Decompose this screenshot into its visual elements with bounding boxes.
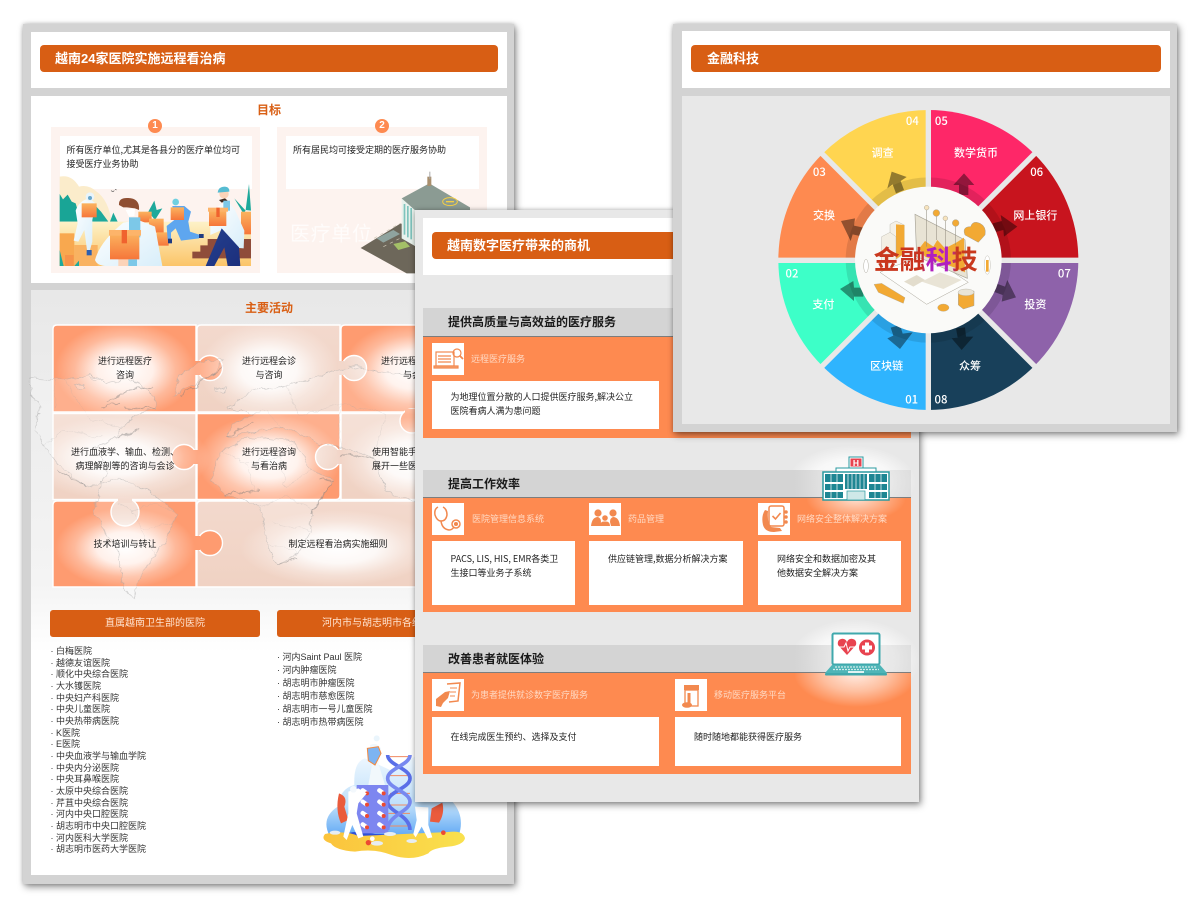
puzzle caption: haematology consult: 病理解剖等的咨询与会诊	[75, 459, 174, 472]
white box 1	[432, 541, 575, 605]
list: city hospitals: · 胡志明市一号儿童医院	[277, 704, 372, 714]
puzzle caption: remote treatment	[242, 445, 296, 472]
icon: hand with phone	[432, 679, 464, 711]
puzzle caption: remote consultation: 进行远程会诊	[242, 354, 296, 367]
icon: hospital building: H	[853, 458, 859, 468]
list: ministry hospitals: · 河内中央口腔医院	[50, 809, 128, 819]
puzzle caption: remote consultation	[242, 354, 296, 381]
goal 2 number badge	[375, 119, 389, 133]
puzzle caption: telemedicine consult	[98, 354, 152, 381]
description 3: 网络安全和数据加密及其	[777, 552, 876, 565]
icon: mobile platform	[675, 679, 707, 711]
puzzle caption: telemedicine consult: 进行远程医疗	[98, 354, 152, 367]
icon: phone security	[758, 503, 790, 535]
goal 1 text box	[60, 136, 252, 189]
description 2: 供应链管理,数据分析解决方案	[608, 552, 728, 565]
description 2: 随时随地都能获得医疗服务	[694, 730, 802, 743]
puzzle caption: smartphone use: 展开一些医疗	[372, 459, 426, 472]
sector 07 investment	[928, 260, 1078, 366]
list: city hospitals: · 胡志明市热带病医院	[277, 716, 364, 726]
sector 01 blockchain	[822, 260, 928, 410]
list: ministry hospitals: · K医院	[50, 728, 80, 738]
label: 网络安全整体解决方案	[797, 514, 887, 524]
list: city hospitals: · 河内Saint Paul 医院	[277, 652, 362, 662]
label: 远程医疗服务	[471, 354, 525, 364]
section bar: efficiency	[423, 470, 911, 498]
puzzle caption: regulations: 制定远程看治病实施细则	[288, 537, 388, 550]
sector numbers: 07	[1058, 265, 1071, 281]
central fintech illustration	[864, 205, 990, 311]
goal 1 number badge: 1	[152, 120, 158, 131]
section body: efficiency	[423, 498, 911, 612]
puzzle caption: smartphone use: 使用智能手机	[372, 445, 426, 458]
puzzle caption: remote treatment: 进行远程咨询	[242, 445, 296, 458]
section body: quality services	[423, 337, 911, 438]
description 1	[450, 552, 558, 579]
arrows	[840, 172, 1017, 350]
left worker	[74, 198, 96, 250]
sector labels: 支付	[812, 296, 834, 312]
sector labels: 数学货币	[954, 145, 998, 161]
sector labels: 众筹	[959, 358, 981, 374]
sector numbers	[786, 113, 1071, 407]
white description box	[432, 381, 659, 429]
list: ministry hospitals: · 中央耳鼻喉医院	[50, 774, 119, 784]
sector numbers: 03	[813, 164, 826, 180]
panel: business opportunities card	[415, 210, 919, 802]
icon: stethoscope	[432, 503, 464, 535]
sector labels: 交换	[813, 207, 835, 223]
list: ministry hospitals: · 中央热带病医院	[50, 716, 119, 726]
list: city hospitals	[277, 652, 372, 726]
heading: main activities: 主要活动	[245, 301, 293, 315]
illustration: isometric hospital building with faded label	[290, 172, 470, 274]
world map overlay	[28, 358, 415, 599]
list: ministry hospitals: · 大水镬医院	[50, 681, 101, 691]
puzzle caption: remote treatment: 与看治病	[251, 459, 287, 472]
central man	[95, 220, 162, 266]
section bar: patient experience	[423, 645, 911, 673]
list: ministry hospitals: · 顺化中央综合医院	[50, 669, 128, 679]
sector numbers: 08	[935, 391, 947, 407]
list: ministry hospitals: · 中央血液学与输血学院	[50, 751, 146, 761]
sector labels: 网上银行	[1013, 207, 1057, 223]
sector numbers: 02	[786, 265, 798, 281]
center circle	[855, 187, 1002, 333]
title banner	[432, 232, 902, 259]
icon: people group	[589, 503, 621, 535]
puzzle caption: remote diagnosis: 进行远程诊断	[381, 354, 435, 367]
right doctor	[210, 201, 244, 248]
description 3	[777, 552, 876, 579]
sector numbers: 01	[905, 391, 918, 407]
button: Hanoi and HCMC hospitals	[277, 610, 487, 637]
sector labels: 区块链	[870, 358, 903, 374]
header panel	[682, 31, 1170, 88]
sector 08 crowdfunding	[928, 260, 1034, 410]
white box 3	[758, 541, 901, 605]
section bar: efficiency: 提高工作效率	[448, 477, 520, 491]
description	[450, 390, 633, 417]
button: hospitals under ministry of health	[50, 610, 260, 637]
panel: goals	[31, 96, 507, 283]
list: ministry hospitals: · 太原中央综合医院	[50, 786, 128, 796]
body panel	[682, 96, 1170, 424]
sector labels: 调查	[872, 145, 894, 161]
header panel	[423, 218, 911, 275]
goal card 1	[51, 127, 260, 273]
puzzle caption: haematology consult: 进行血液学、输血、检测、	[71, 445, 179, 458]
list: city hospitals: · 胡志明市肿瘤医院	[277, 678, 354, 688]
illustration: medical workers carrying boxes	[60, 176, 251, 266]
title banner: 越南数字医疗带来的商机	[447, 238, 590, 253]
sector 02 payment	[778, 260, 928, 366]
title banner	[40, 45, 498, 72]
sector 06 online banking	[928, 154, 1078, 260]
glow behind laptop icon	[791, 620, 919, 700]
goal 2 text: 所有居民均可接受定期的医疗服务协助	[293, 143, 446, 156]
goal 2 text box	[286, 136, 479, 189]
description 3: 他数据安全解决方案	[777, 566, 858, 579]
list: ministry hospitals: · 胡志明市中央口腔医院	[50, 821, 146, 831]
puzzle caption: smartphone use	[372, 445, 426, 472]
description: 医院看病人满为患问题	[450, 404, 541, 417]
heading: goals: 目标	[257, 103, 281, 117]
section body: patient experience	[423, 673, 911, 774]
sector numbers: 05	[935, 113, 948, 129]
label: 医院管理信息系统	[472, 514, 544, 524]
list: ministry hospitals: · 越德友谊医院	[50, 658, 110, 668]
central title: 金融科技	[874, 240, 978, 277]
panel: main activities and hospital lists	[31, 290, 507, 875]
section bar: quality services: 提供高质量与高效益的医疗服务	[448, 315, 616, 329]
illustration: DNA and pills with scientists	[323, 736, 465, 858]
goal 1 text: 接受医疗业务协助	[66, 157, 139, 170]
title banner: 越南24家医院实施远程看治病	[55, 51, 225, 66]
puzzle caption: remote diagnosis: 与会诊	[403, 368, 430, 381]
icon: hospital building	[822, 456, 890, 501]
sector labels	[812, 145, 1057, 374]
list: ministry hospitals: · E医院	[50, 739, 80, 749]
white box 2	[675, 717, 901, 766]
header panel	[31, 32, 507, 88]
list: ministry hospitals: · 中央妇产科医院	[50, 693, 119, 703]
button: hospitals under ministry of health: 直属越南卫生部的医院	[105, 618, 205, 629]
icon: laptop with heart and cross	[825, 632, 887, 676]
sector 03 exchange	[778, 154, 928, 260]
icon: remote medical search	[432, 343, 464, 375]
list: city hospitals: · 胡志明市慈愈医院	[277, 690, 354, 700]
goal 2 number badge: 2	[379, 120, 385, 131]
description 1: 在线完成医生预约、选择及支付	[450, 730, 577, 743]
goal card 2	[277, 127, 487, 273]
sector 05 digital currency	[928, 110, 1034, 260]
goal 1 number badge	[148, 119, 162, 133]
sector labels: 投资	[1024, 296, 1046, 312]
glows behind captions	[54, 326, 415, 586]
goal 1 text	[66, 143, 240, 170]
puzzle caption: training: 技术培训与转让	[93, 537, 156, 550]
list: ministry hospitals: · 芹苴中央综合医院	[50, 798, 128, 808]
faded label: medical units: 医疗单位	[290, 223, 373, 246]
list: ministry hospitals: · 河内医科大学医院	[50, 832, 128, 842]
label: 药品管理	[628, 514, 664, 524]
goal 1 text: 所有医疗单位,尤其是各县分的医疗单位均可	[66, 143, 240, 156]
puzzle caption: remote diagnosis	[381, 354, 435, 381]
sector numbers: 06	[1030, 164, 1043, 180]
sector numbers: 04	[906, 113, 919, 129]
description 1: PACS, LIS, HIS, EMR各类卫	[450, 552, 558, 565]
runner	[172, 199, 179, 205]
button: Hanoi and HCMC hospitals: 河内市与胡志明市各级医院	[322, 618, 442, 629]
list: ministry hospitals: · 胡志明市医药大学医院	[50, 844, 146, 854]
puzzle of telemedicine activities	[52, 324, 415, 588]
panel: fintech card	[673, 24, 1177, 432]
description 1: 生接口等业务子系统	[450, 566, 532, 579]
section bar: quality services	[423, 308, 911, 337]
title banner: 金融科技	[707, 51, 759, 66]
puzzle caption: remote consultation: 与咨询	[255, 368, 282, 381]
label: 为患者提供就诊数字医疗服务	[471, 690, 588, 700]
list: ministry hospitals: · 中央儿童医院	[50, 704, 110, 714]
section bar: patient experience: 改善患者就医体验	[448, 652, 544, 666]
label: 移动医疗服务平台	[714, 690, 786, 700]
puzzle caption: telemedicine consult: 咨询	[116, 368, 134, 381]
white box 1	[432, 717, 659, 766]
fintech wheel diagram	[778, 110, 1078, 410]
list: ministry hospitals: · 白梅医院	[50, 646, 92, 656]
title banner	[691, 45, 1161, 72]
panel: Vietnam 24 hospitals telemedicine card	[23, 24, 514, 884]
list: ministry hospitals: · 中央内分泌医院	[50, 763, 119, 773]
list: ministry hospitals	[50, 646, 146, 854]
glow behind hospital icon	[789, 446, 915, 518]
description: 为地理位置分散的人口提供医疗服务,解决公立	[450, 390, 633, 403]
list: city hospitals: · 河内肿瘤医院	[277, 664, 336, 674]
sector 04 survey	[822, 110, 928, 260]
white box 2	[589, 541, 743, 605]
puzzle caption: haematology consult	[71, 445, 179, 472]
